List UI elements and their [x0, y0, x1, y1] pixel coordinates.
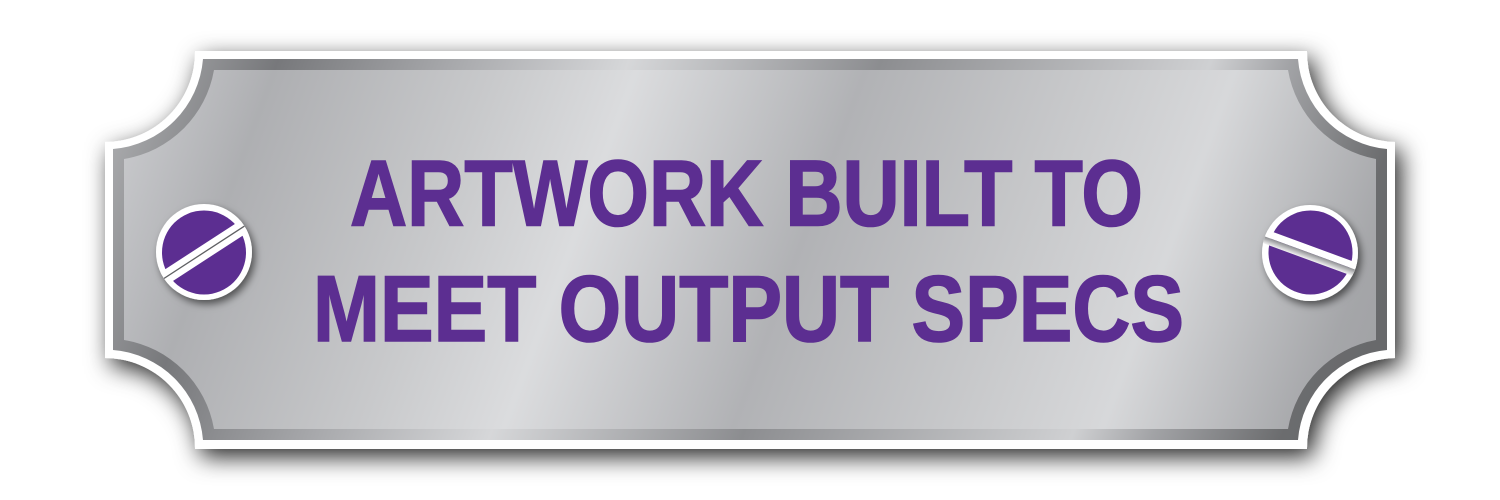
plaque body — [105, 51, 1395, 449]
plaque infographic — [91, 39, 1421, 477]
icon: right screw — [1250, 205, 1370, 301]
white outer frame — [105, 51, 1395, 449]
icon: left screw — [146, 204, 260, 300]
title — [313, 141, 1184, 361]
metal border band — [113, 59, 1387, 440]
brushed metal plate — [124, 70, 1376, 429]
title line 2: MEET OUTPUT SPECS — [313, 256, 1184, 361]
title line 1: ARTWORK BUILT TO — [350, 141, 1143, 246]
